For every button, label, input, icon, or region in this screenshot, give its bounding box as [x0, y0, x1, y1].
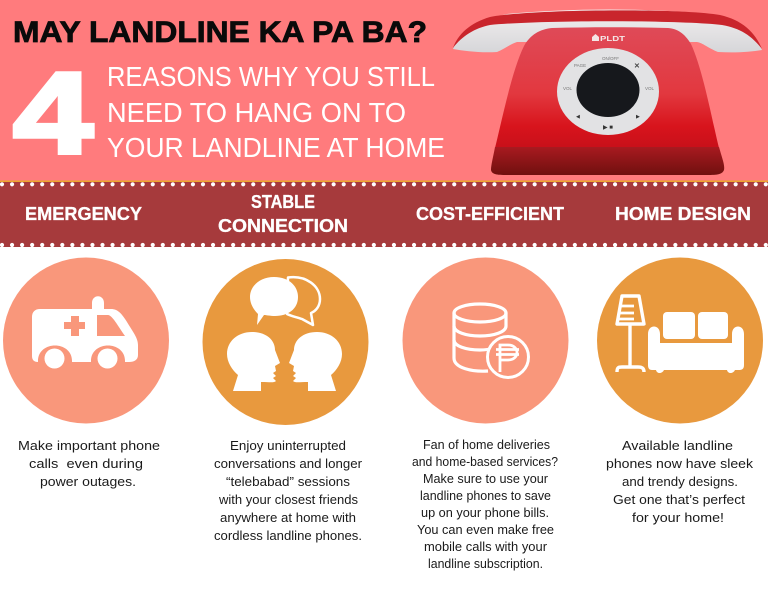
text: home design — [606, 438, 754, 525]
ring labels — [563, 56, 655, 131]
banner labels: STABLE — [251, 192, 315, 212]
ring labels: VOL — [563, 86, 573, 91]
text: cost-efficient: landline subscription. — [428, 556, 543, 571]
text: cost-efficient: Fan of home deliveries — [423, 437, 550, 452]
phone body — [495, 27, 719, 148]
banner labels — [25, 192, 751, 236]
text: home design: and trendy designs. — [622, 474, 738, 489]
ring labels: ▶ — [636, 114, 640, 120]
text: emergency: power outages. — [40, 474, 136, 489]
banner labels: HOME DESIGN — [615, 204, 751, 224]
phone base — [491, 147, 724, 175]
ring labels: PAGE — [574, 63, 586, 68]
icon: ambulance — [3, 258, 169, 424]
text: home design: Get one that’s perfect — [613, 492, 745, 507]
subtitle: NEED TO HANG ON TO — [107, 97, 406, 128]
text: home design: for your home! — [632, 510, 724, 525]
text: home design: phones now have sleek — [606, 456, 754, 471]
text: emergency: calls even during — [29, 456, 143, 471]
header background — [0, 0, 768, 181]
PLDT logo: PLDT — [600, 34, 626, 43]
subtitle — [107, 61, 445, 163]
icon: red PLDT telephone — [453, 10, 762, 175]
text: cost-efficient — [412, 437, 558, 571]
text: stable connection: cordless landline phones. — [214, 528, 362, 543]
text: emergency — [18, 438, 160, 489]
ring labels: ON/OFF — [602, 56, 619, 61]
red banner — [0, 180, 768, 247]
text: stable connection: conversations and longer — [214, 456, 363, 471]
ring labels: VOL — [645, 86, 655, 91]
text: stable connection: Enjoy uninterrupted — [230, 438, 346, 453]
text: cost-efficient: mobile calls with your — [424, 539, 548, 554]
banner labels: CONNECTION — [218, 216, 348, 236]
big number 4: 4 — [13, 48, 93, 178]
text: cost-efficient: Make sure to use your — [423, 471, 549, 486]
subtitle: YOUR LANDLINE AT HOME — [107, 132, 445, 163]
icon: coins with peso — [402, 258, 568, 424]
ring labels: ◀ — [576, 114, 580, 120]
text: stable connection: with your closest friends — [218, 492, 358, 507]
icon: two heads talking — [202, 259, 368, 425]
banner labels: COST-EFFICIENT — [416, 204, 564, 224]
text: emergency: Make important phone — [18, 438, 160, 453]
display — [576, 63, 640, 117]
text: cost-efficient: and home-based services? — [412, 454, 558, 469]
text: cost-efficient: up on your phone bills. — [421, 505, 549, 520]
text: stable connection — [214, 438, 363, 543]
text: stable connection: “telebabad” sessions — [226, 474, 351, 489]
text: cost-efficient: landline phones to save — [420, 488, 551, 503]
icon: lamp and sofa — [597, 258, 763, 424]
ring labels: ✕ — [634, 63, 640, 70]
subtitle: REASONS WHY YOU STILL — [107, 61, 435, 92]
text: stable connection: anywhere at home with — [220, 510, 356, 525]
banner labels: EMERGENCY — [25, 204, 142, 224]
control ring — [557, 48, 659, 135]
title: MAY LANDLINE KA PA BA? — [13, 16, 427, 49]
text: cost-efficient: You can even make free — [417, 522, 554, 537]
ring labels: ▶ ■ — [603, 125, 613, 131]
text: home design: Available landline — [622, 438, 733, 453]
handset — [453, 10, 762, 52]
